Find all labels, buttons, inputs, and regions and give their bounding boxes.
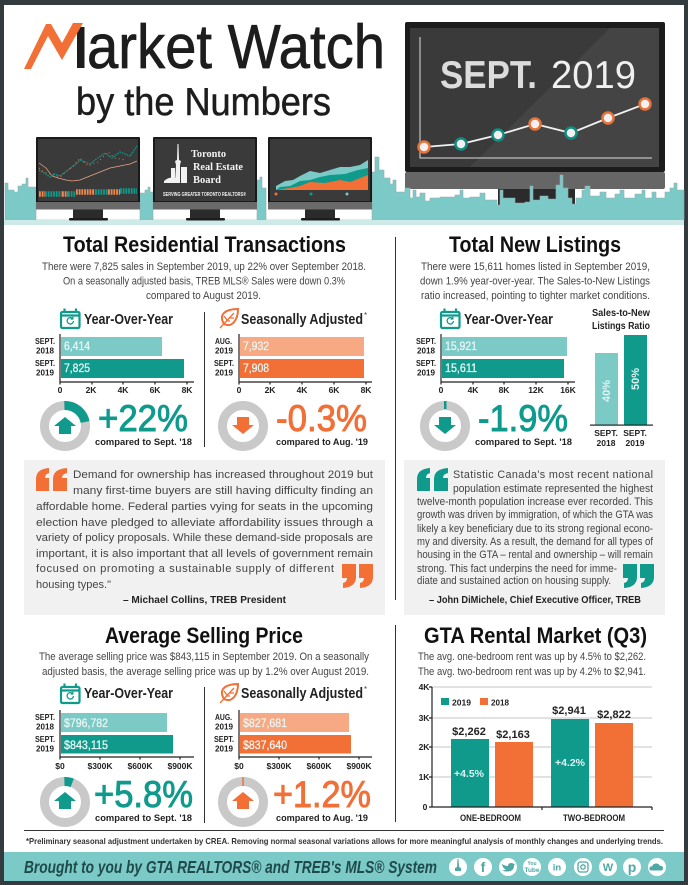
heading: GTA Rental Market (Q3) — [424, 623, 647, 648]
donut: +22% — [44, 406, 86, 446]
bar chart: price seasonally adjusted: SEPT. — [214, 735, 234, 744]
bar chart: year-over-year sales: 7,825 — [64, 363, 90, 375]
donut: +5.8% — [44, 782, 86, 822]
intro text: adjusted basis, the average selling price was up by 1.2% over August 2019. — [42, 666, 369, 678]
panel: total residential transactions: compared to Aug. '19 — [276, 437, 368, 448]
title — [24, 13, 385, 124]
footer band — [4, 852, 684, 881]
chart: sales-to-new listings ratio: SEPT. — [594, 428, 618, 438]
social icons: p — [628, 859, 636, 875]
chart: sales-to-new listings ratio — [590, 307, 653, 448]
quote text: twelve-month population increase ever recorded. This — [417, 496, 654, 508]
bar chart: rents: +4.2% — [555, 757, 586, 769]
chart: sales-to-new listings ratio: 2019 — [626, 438, 645, 448]
quote text — [36, 469, 374, 591]
bar chart: price year-over-year: $0 — [55, 761, 65, 771]
subheading: year-over-year: Year-Over-Year — [464, 311, 553, 328]
bar chart: price year-over-year: SEPT. — [35, 713, 55, 722]
intro text — [39, 651, 369, 678]
quote text: housing types." — [36, 579, 111, 591]
subheading: seasonally adjusted: Seasonally Adjusted — [241, 311, 363, 328]
heading: Total Residential Transactions — [63, 232, 346, 257]
social icons — [449, 858, 666, 876]
logo mark: orange M zigzag — [24, 23, 83, 69]
bar chart: seasonally adjusted sales: AUG. — [215, 337, 232, 346]
bar chart: new listings: 15,921 — [445, 341, 477, 353]
date heading — [440, 54, 636, 97]
bar chart: seasonally adjusted sales — [214, 334, 372, 395]
bar chart: price seasonally adjusted: $300K — [266, 761, 292, 771]
intro text: On a seasonally adjusted basis, TREB MLS® Sales were down 0.3% — [63, 276, 345, 288]
header skyline — [4, 157, 684, 225]
quote text: focused on promoting a sustainable supply of different — [36, 563, 335, 575]
icon: calendar — [441, 308, 460, 328]
attribution: – John DiMichele, Chief Executive Officer, TREB — [429, 594, 641, 606]
intro text: There were 7,825 sales in September 2019, up 22% over September 2018. — [42, 261, 366, 273]
bar chart: rents: $2,262 — [452, 726, 486, 738]
bar chart: price year-over-year: $300K — [87, 761, 113, 771]
bar chart: new listings: 16K — [560, 385, 577, 395]
intro text: down 1.9% year-over-year. The Sales-to-New Listings — [420, 276, 650, 288]
bar chart: rents: +4.5% — [454, 768, 485, 780]
bar chart: price year-over-year: 2019 — [36, 744, 54, 754]
bar chart: price seasonally adjusted — [214, 710, 372, 771]
intro text: The avg. two-bedroom rent was up by 4.2% to $2,941. — [418, 666, 646, 678]
icon: leaf — [220, 309, 238, 328]
intro text — [42, 261, 366, 302]
icon: leaf — [220, 684, 238, 703]
bar chart: year-over-year sales: 8K — [182, 385, 193, 395]
footer credit: Brought to you by GTA REALTORS® and TREB's MLS® System — [24, 857, 437, 877]
donut: -0.3% — [222, 406, 264, 446]
donut: +1.2% — [222, 777, 264, 822]
legend: 2019 — [452, 698, 471, 708]
icon: CN tower and skyline — [164, 144, 187, 183]
social icons: in — [553, 862, 561, 874]
quote text: important, it is also important that all levels of government remain — [36, 548, 373, 560]
social icons: You — [527, 861, 537, 867]
bar chart: new listings: 8K — [499, 385, 510, 395]
bar chart: rents — [419, 682, 652, 823]
bar chart: price year-over-year: SEPT. — [35, 735, 55, 744]
intro text: There were 15,611 homes listed in September 2019, — [421, 261, 650, 273]
bar chart: price seasonally adjusted: 2019 — [215, 722, 233, 732]
bar chart: price seasonally adjusted: AUG. — [215, 713, 232, 722]
attribution: – Michael Collins, TREB President — [123, 594, 286, 606]
bar chart: seasonally adjusted sales: 4K — [297, 385, 308, 395]
bar chart: price year-over-year: $900K — [167, 761, 193, 771]
bar chart: price seasonally adjusted: $827,681 — [243, 718, 287, 730]
bar chart: rents: TWO-BEDROOM — [563, 813, 625, 823]
stat: +1.2%: +1.2% — [273, 774, 371, 815]
heading: Average Selling Price — [105, 623, 303, 648]
bar chart: year-over-year sales: 6,414 — [64, 341, 91, 353]
bar chart: seasonally adjusted sales: 2019 — [215, 368, 233, 378]
subheading: year-over-year: Year-Over-Year — [84, 685, 173, 702]
panel: average selling price: compared to Sept. '18 — [95, 813, 192, 824]
panel: total residential transactions — [35, 232, 372, 448]
panel: quote John DiMichele — [404, 460, 665, 615]
intro text: The average selling price was $843,115 in September 2019. On a seasonally — [39, 651, 369, 663]
quote text — [417, 469, 654, 587]
quote text: housing in the GTA – rental and ownership – will remain — [417, 549, 653, 561]
monitor: TREB logo — [153, 137, 257, 220]
bar chart: seasonally adjusted sales: 7,932 — [243, 341, 269, 353]
panel: average selling price: * — [364, 685, 367, 694]
panel: quote Michael Collins — [24, 460, 385, 615]
bar chart: year-over-year sales: SEPT. — [35, 359, 55, 368]
subheading: seasonally adjusted: Seasonally Adjusted — [241, 685, 363, 702]
bar chart: new listings: SEPT. — [416, 359, 436, 368]
monitor: TREB logo: Toronto — [191, 149, 226, 160]
date heading: SEPT. — [440, 54, 537, 97]
panel: total new listings: compared to Sept. '18 — [475, 437, 572, 448]
intro text: ratio increased, pointing to tighter market conditions. — [421, 290, 650, 302]
monitor: TREB logo: SERVING GREATER TORONTO REALTORS® — [163, 191, 246, 198]
bar chart: price year-over-year: 2018 — [36, 722, 54, 732]
quote text: population estimate represented the highest — [453, 483, 653, 495]
bar chart: new listings: 4K — [468, 385, 479, 395]
subheading: year-over-year: Year-Over-Year — [84, 311, 173, 328]
panel: average selling price: compared to Aug. '19 — [276, 813, 368, 824]
quote text: diate and sustained action on housing supply. — [417, 575, 611, 587]
quote text: variety of policy proposals. While these demand-side proposals are — [36, 532, 373, 544]
bar chart: new listings: SEPT. — [416, 337, 436, 346]
bar chart: price seasonally adjusted: $900K — [346, 761, 372, 771]
icon: calendar — [61, 308, 80, 328]
social icons: f — [481, 859, 486, 875]
bar chart: year-over-year sales: 2019 — [36, 368, 54, 378]
panel: total residential transactions: compared to Sept. '18 — [95, 437, 192, 448]
stat: +22%: +22% — [98, 398, 188, 439]
bar chart: rents: 4K — [419, 682, 430, 692]
bar chart: rents: $2,941 — [552, 705, 586, 717]
social icons: Tube — [524, 867, 540, 874]
bar chart: new listings: 2018 — [417, 346, 435, 356]
bar chart: rents: 2K — [419, 742, 430, 752]
bar chart: new listings: 0 — [439, 385, 444, 395]
icon: closing quote — [342, 564, 373, 588]
quote text: election have pledged to alleviate affordability issues through a — [36, 517, 374, 529]
bar chart: price seasonally adjusted: $600K — [306, 761, 332, 771]
bar chart: price year-over-year — [35, 710, 194, 771]
quote text: growth was driven by immigration, of which the GTA was — [417, 509, 654, 521]
chart: sales-to-new listings ratio: 40% — [601, 380, 613, 402]
icon: calendar — [61, 684, 80, 703]
bar chart: price year-over-year: $796,782 — [64, 718, 108, 730]
heading: Total New Listings — [449, 232, 621, 257]
stat: -1.9%: -1.9% — [478, 398, 568, 439]
legend: 2018 — [491, 698, 509, 708]
bar chart: seasonally adjusted sales: 2K — [265, 385, 276, 395]
quote text: my and diversity. As a result, the demand for all types of — [417, 536, 654, 548]
chart: sales-to-new listings ratio: Listings Ratio — [592, 320, 650, 332]
bar chart: price seasonally adjusted: $837,640 — [243, 740, 287, 752]
quote text: likely a key beneficiary due to its strong regional econo- — [417, 523, 653, 535]
bar chart: rents: $2,822 — [597, 709, 631, 721]
bar chart: price seasonally adjusted: 2019 — [215, 744, 233, 754]
stat: +5.8%: +5.8% — [94, 774, 193, 815]
panel: GTA rental market — [418, 623, 652, 823]
quote text: affordable home. Federal parties vying for seats in the upcoming — [36, 501, 373, 513]
quote text: Statistic Canada's most recent national — [453, 469, 653, 481]
bar chart: rents: 3K — [419, 713, 430, 723]
bar chart: year-over-year sales: 0 — [58, 385, 63, 395]
icon: closing quote — [623, 564, 654, 588]
bar chart: rents: ONE-BEDROOM — [460, 813, 521, 823]
social icons: W — [603, 862, 614, 874]
bar chart: rents: $2,163 — [496, 729, 530, 741]
monitor: area chart — [268, 137, 372, 220]
chart: sales-to-new listings ratio: SEPT. — [623, 428, 647, 438]
intro text — [418, 651, 646, 678]
bar chart: rents: 0 — [423, 802, 428, 812]
chart: sales-to-new listings ratio: 50% — [630, 368, 642, 390]
bar chart: year-over-year sales: 2018 — [36, 346, 54, 356]
icon: opening quote — [417, 468, 448, 491]
bar chart: price year-over-year: $843,115 — [64, 740, 108, 752]
line chart — [418, 98, 650, 152]
bar chart: seasonally adjusted sales: 2019 — [215, 346, 233, 356]
bar chart: year-over-year sales: SEPT. — [35, 337, 55, 346]
bar chart: rents: 1K — [419, 772, 430, 782]
panel: total residential transactions: * — [364, 311, 367, 320]
panel: total new listings — [416, 232, 653, 448]
icon: opening quote — [36, 468, 67, 491]
bar chart: seasonally adjusted sales: SEPT. — [214, 359, 234, 368]
bar chart: seasonally adjusted sales: 6K — [329, 385, 340, 395]
legend — [441, 698, 509, 708]
intro text — [420, 261, 650, 302]
bar chart: new listings: 2019 — [417, 368, 435, 378]
bar chart: seasonally adjusted sales: 0 — [237, 385, 242, 395]
bar chart: seasonally adjusted sales: 8K — [361, 385, 372, 395]
bar chart: new listings: 12K — [528, 385, 545, 395]
bar chart: price seasonally adjusted: $0 — [234, 761, 244, 771]
bar chart: year-over-year sales: 6K — [150, 385, 161, 395]
monitor: stock chart — [36, 137, 140, 220]
monitor: TREB logo: Board — [193, 175, 221, 186]
title: by the Numbers — [76, 81, 331, 124]
chart: sales-to-new listings ratio: Sales-to-New — [592, 307, 651, 319]
stat: -0.3%: -0.3% — [276, 398, 367, 439]
intro text: The avg. one-bedroom rent was up by 4.5% to $2,262. — [418, 651, 646, 663]
chart: sales-to-new listings ratio: 2018 — [597, 438, 616, 448]
bar chart: year-over-year sales: 2K — [86, 385, 97, 395]
panel: average selling price — [35, 623, 372, 824]
title: arket Watch — [87, 13, 385, 82]
bar chart: seasonally adjusted sales: 7,908 — [243, 363, 269, 375]
date heading: 2019 — [551, 54, 636, 97]
intro text: compared to August 2019. — [146, 290, 261, 302]
donut: -1.9% — [424, 401, 466, 446]
large monitor: Sept. 2019 — [405, 22, 665, 206]
quote text: Demand for ownership has increased throughout 2019 but — [73, 469, 374, 481]
quote text: strong. This fact underpins the need for imme- — [417, 563, 617, 575]
bar chart: new listings — [416, 334, 577, 395]
bar chart: price year-over-year: $600K — [127, 761, 153, 771]
bar chart: year-over-year sales — [35, 334, 194, 395]
bar chart: year-over-year sales: 4K — [118, 385, 129, 395]
bar chart: new listings: 15,611 — [445, 363, 477, 375]
quote text: many first-time buyers are still having difficulty finding an — [73, 485, 373, 497]
monitor: TREB logo: Real Estate — [193, 162, 243, 173]
